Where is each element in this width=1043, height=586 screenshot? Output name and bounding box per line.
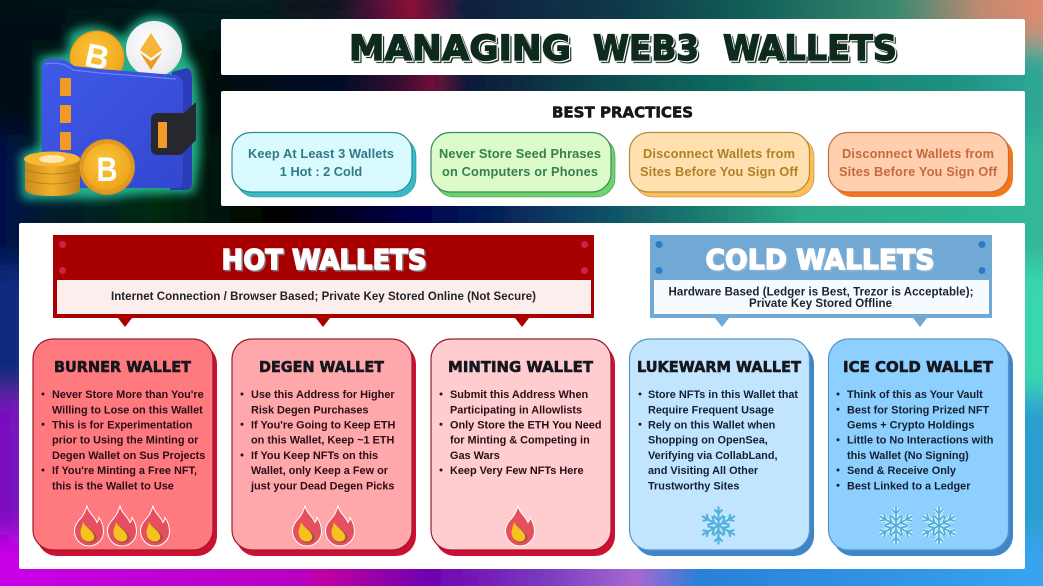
- card: degen wallet: [232, 339, 416, 556]
- heading: hot wallets: HOT WALLETS: [222, 243, 426, 276]
- bullet list: This is for Experimentation: [52, 420, 192, 432]
- bullet list: Gems + Crypto Holdings: [847, 420, 974, 432]
- icon: three flames: [74, 506, 170, 546]
- practice card: disconnect wallets, amber: Disconnect Wallets from: [643, 146, 795, 161]
- bullet list: this Wallet (No Signing): [847, 450, 969, 462]
- card title: BURNER WALLET: [54, 358, 191, 376]
- bullet list: Wallet, only Keep a Few or: [251, 465, 389, 477]
- heading: cold wallets: COLD WALLETS: [706, 243, 934, 276]
- bullet list: [836, 389, 993, 492]
- panel: best practices: [221, 91, 1025, 206]
- practice card: disconnect wallets, orange: Sites Before You Sign Off: [839, 164, 998, 179]
- bullet list: [42, 389, 205, 492]
- practice card: seed phrases: [431, 132, 615, 197]
- card title: MINTING WALLET: [448, 358, 593, 376]
- icon: wallet body: [42, 59, 192, 190]
- practice card: disconnect wallets, orange: [828, 132, 1013, 197]
- card title: LUKEWARM WALLET: [637, 358, 801, 376]
- bullet list: [440, 389, 601, 477]
- wallet illustration: [24, 19, 197, 196]
- cold wallets description: Hardware Based (Ledger is Best, Trezor is Acceptable);: [668, 286, 974, 298]
- card: lukewarm wallet: [630, 339, 814, 556]
- bullet list: If You're Minting a Free NFT,: [52, 465, 197, 477]
- banner: cold wallets: [650, 235, 992, 327]
- card: minting wallet: [431, 339, 615, 556]
- bullet list: Verifying via CollabLand,: [648, 450, 778, 462]
- title: WALLETS: [723, 29, 897, 69]
- bullet list: If You're Going to Keep ETH: [251, 420, 396, 432]
- bullet list: this is the Wallet to Use: [52, 480, 174, 492]
- practice card: disconnect wallets, orange: Disconnect Wallets from: [842, 146, 994, 161]
- icon: bitcoin coin in wallet: B: [82, 36, 113, 77]
- bullet list: Little to No Interactions with: [847, 435, 993, 447]
- icon: coin stack: [24, 152, 80, 196]
- practice card: three wallets: Keep At Least 3 Wallets: [248, 146, 394, 161]
- bullet list: Rely on this Wallet when: [648, 420, 775, 432]
- bullet list: Store NFTs in this Wallet that: [648, 389, 798, 401]
- title: WEB3: [593, 29, 699, 69]
- icon: one flame: [506, 506, 534, 546]
- banner: cold wallets: Private Key Stored Offline: [749, 298, 892, 310]
- bullet list: Require Frequent Usage: [648, 404, 774, 416]
- icon: wallet clasp: [151, 102, 196, 155]
- practice card: seed phrases: Never Store Seed Phrases: [439, 146, 601, 161]
- banner: hot wallets: [53, 235, 594, 327]
- bullet list: [638, 389, 798, 492]
- bullet list: Only Store the ETH You Need: [450, 420, 601, 432]
- practice card: three wallets: 1 Hot : 2 Cold: [280, 164, 362, 179]
- card: ice cold wallet: [828, 339, 1013, 556]
- title panel: [221, 19, 1025, 75]
- bullet list: Best Linked to a Ledger: [847, 480, 971, 492]
- bullet list: just your Dead Degen Picks: [250, 480, 394, 492]
- heading: best practices: BEST PRACTICES: [552, 104, 693, 122]
- bullet list: Think of this as Your Vault: [847, 389, 983, 401]
- icon: bitcoin coin in wallet: [70, 31, 124, 85]
- icon: ethereum coin: [126, 21, 182, 77]
- card: burner wallet: [33, 339, 217, 556]
- practice card: seed phrases: on Computers or Phones: [442, 164, 598, 179]
- bullet list: for Minting & Competing in: [450, 435, 590, 447]
- icon: one snowflake: [700, 506, 737, 544]
- bullet list: Risk Degen Purchases: [251, 404, 368, 416]
- bullet list: Degen Wallet on Sus Projects: [52, 450, 205, 462]
- bullet list: and Visiting All Other: [648, 465, 759, 477]
- practice card: disconnect wallets, amber: Sites Before You Sign Off: [640, 164, 799, 179]
- practice card: disconnect wallets, amber: [630, 132, 814, 197]
- bullet list: Participating in Allowlists: [450, 404, 582, 416]
- bullet list: Best for Storing Prized NFT: [847, 404, 990, 416]
- card title: ICE COLD WALLET: [843, 358, 993, 376]
- main panel: [19, 223, 1025, 569]
- icon: bitcoin coin front: [80, 140, 134, 194]
- icon glow: [24, 19, 197, 196]
- title: MANAGING: [349, 29, 571, 69]
- bullet list: Keep Very Few NFTs Here: [450, 465, 584, 477]
- title: [349, 29, 897, 69]
- bullet list: Use this Address for Higher: [251, 389, 395, 401]
- bullet list: [240, 389, 396, 492]
- bullet list: Never Store More than You're: [52, 389, 204, 401]
- bullet list: If You Keep NFTs on this: [251, 450, 378, 462]
- bullet list: Shopping on OpenSea,: [648, 435, 768, 447]
- card title: DEGEN WALLET: [259, 358, 384, 376]
- icon: two snowflakes: [877, 506, 958, 544]
- practice card: three wallets: [232, 132, 416, 197]
- bullet list: Submit this Address When: [450, 389, 588, 401]
- bullet list: Willing to Lose on this Wallet: [52, 404, 203, 416]
- bullet list: prior to Using the Minting or: [52, 435, 199, 447]
- bullet list: Gas Wars: [450, 450, 500, 462]
- bullet list: on this Wallet, Keep ~1 ETH: [251, 435, 394, 447]
- icon: two flames: [292, 506, 354, 546]
- bullet list: Trustworthy Sites: [648, 480, 739, 492]
- bullet list: Send & Receive Only: [847, 465, 956, 477]
- icon: bitcoin coin front: B: [96, 151, 118, 189]
- hot wallets description: Internet Connection / Browser Based; Private Key Stored Online (Not Secure): [111, 291, 536, 303]
